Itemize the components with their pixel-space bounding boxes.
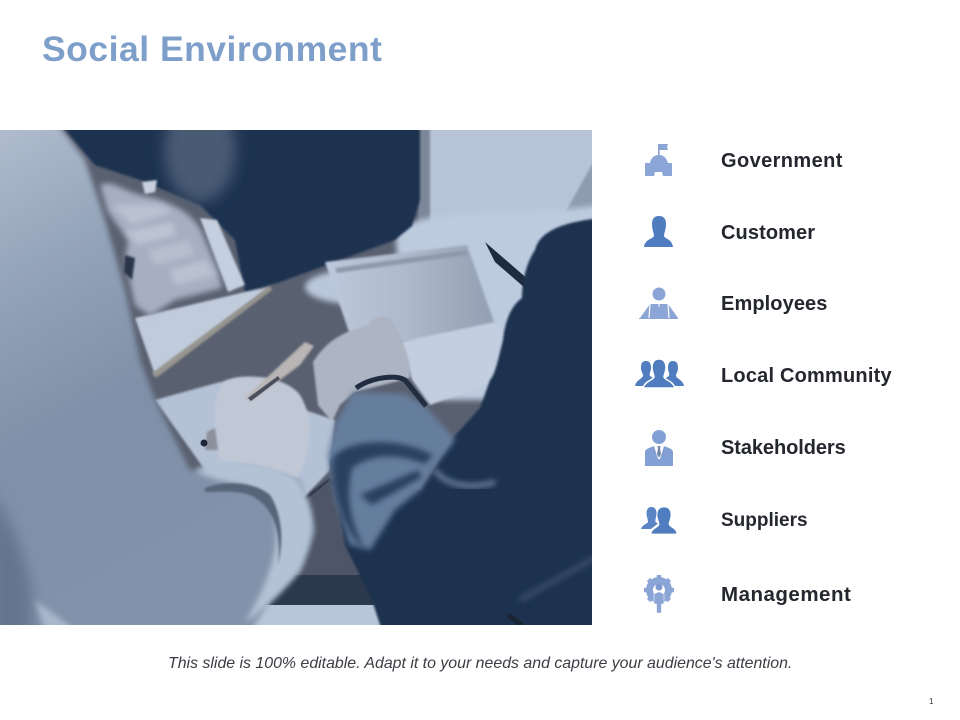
- footer note: This slide is 100% editable. Adapt it to your needs and capture your audience's attention.: [168, 655, 792, 672]
- label: management: Management: [721, 583, 851, 606]
- photo: business meeting at a table: [0, 130, 592, 625]
- label: stakeholders: Stakeholders: [721, 437, 846, 459]
- label: government: Government: [721, 150, 843, 172]
- central document: [325, 245, 495, 342]
- dark suit, top: [55, 120, 420, 292]
- lower paper: [155, 382, 335, 502]
- icon: management gear: [644, 575, 674, 613]
- label: local community: Local Community: [721, 365, 892, 387]
- left sleeve: [0, 120, 315, 640]
- laptop corner: [560, 150, 600, 222]
- label: suppliers: Suppliers: [721, 510, 808, 531]
- page number: 1: [929, 697, 933, 706]
- icon: government building: [645, 144, 672, 176]
- label: customer: Customer: [721, 222, 815, 244]
- table foreground: [300, 480, 370, 575]
- right arm and sleeve: [328, 218, 600, 640]
- icon: local community: [635, 360, 684, 388]
- icon: customer: [644, 216, 673, 247]
- label: employees: Employees: [721, 293, 828, 315]
- title: Social Environment: [42, 29, 382, 69]
- left hand with pen: [200, 342, 314, 478]
- pen, right: [485, 242, 530, 288]
- background wall: [425, 120, 605, 270]
- icon: suppliers: [641, 507, 676, 534]
- watch strap: [356, 377, 426, 406]
- clasped hands: [100, 180, 245, 316]
- icon: employees: [639, 288, 678, 319]
- clipboard under clasped hands: [135, 287, 270, 375]
- white desk area: [395, 205, 600, 400]
- icon: stakeholders: [645, 430, 673, 466]
- right hand: [313, 317, 410, 422]
